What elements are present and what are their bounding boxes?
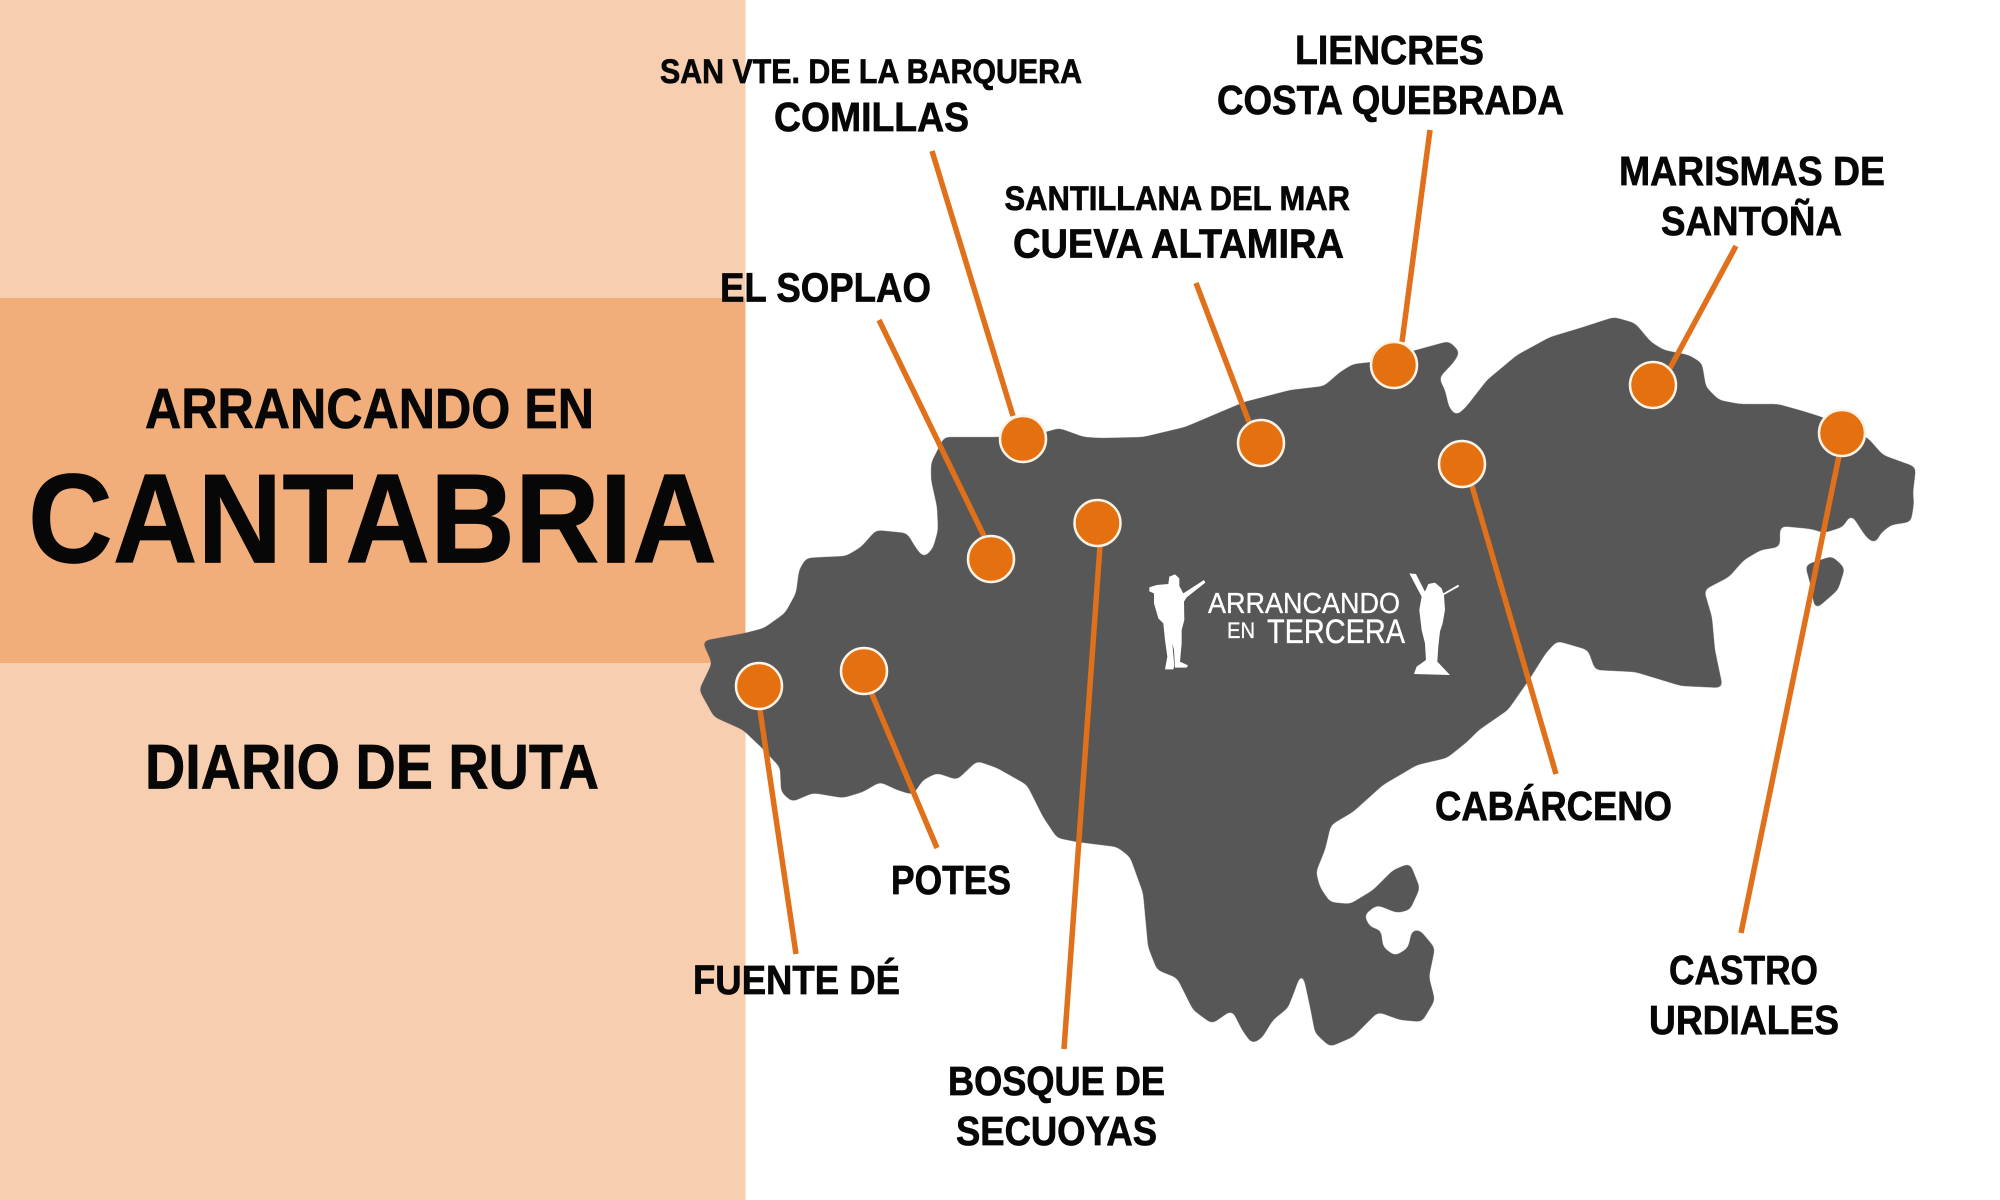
location: El Soplao <box>720 264 1014 582</box>
logo text: TERCERA: TERCERA <box>1267 613 1405 651</box>
location: Fuente Dé <box>693 663 900 1003</box>
location: Bosque de Secuoyas <box>948 500 1165 1154</box>
icon: hiker on summit <box>1409 573 1459 675</box>
location: Fuente Dé: FUENTE DÉ <box>693 957 900 1003</box>
logo text: EN: EN <box>1227 618 1255 643</box>
panel: left background <box>0 0 746 1200</box>
heading: ARRANCANDO EN: ARRANCANDO EN <box>145 377 594 441</box>
location: Cabárceno: CABÁRCENO <box>1435 783 1672 829</box>
location: San Vte. de la Barquera / Comillas: COMILLAS <box>774 94 969 140</box>
location: Santillana del Mar / Cueva Altamira: SANTILLANA DEL MAR <box>1004 180 1350 218</box>
map: Cantabria silhouette <box>699 317 1916 1047</box>
location: Marismas de Santoña: MARISMAS DE <box>1619 148 1885 194</box>
location: Cabárceno <box>1435 441 1672 829</box>
location: Potes <box>841 648 1011 903</box>
location: Liencres / Costa Quebrada: COSTA QUEBRADA <box>1217 77 1564 123</box>
location: San Vte. de la Barquera / Comillas: SAN VTE. DE LA BARQUERA <box>660 53 1082 91</box>
location: Santillana del Mar / Cueva Altamira <box>1004 180 1350 466</box>
icon: hiker pointing <box>1149 574 1205 669</box>
heading: DIARIO DE RUTA: DIARIO DE RUTA <box>145 732 599 802</box>
location: Bosque de Secuoyas: SECUOYAS <box>956 1108 1157 1154</box>
location: Bosque de Secuoyas: BOSQUE DE <box>948 1058 1165 1104</box>
location: Marismas de Santoña <box>1619 148 1885 408</box>
location: Marismas de Santoña: SANTOÑA <box>1661 198 1842 244</box>
heading: CANTABRIA: CANTABRIA <box>28 448 717 590</box>
location: Santillana del Mar / Cueva Altamira: CUEVA ALTAMIRA <box>1013 220 1344 266</box>
logo: Arrancando en Tercera <box>1149 573 1459 675</box>
location: Liencres / Costa Quebrada: LIENCRES <box>1295 27 1484 73</box>
location: Castro Urdiales <box>1649 410 1865 1043</box>
logo text: ARRANCANDO: ARRANCANDO <box>1208 588 1400 620</box>
location: Castro Urdiales: URDIALES <box>1649 997 1839 1043</box>
location: Liencres / Costa Quebrada <box>1217 27 1564 388</box>
panel: title band <box>0 298 746 663</box>
location: Castro Urdiales: CASTRO <box>1669 947 1818 993</box>
location: Potes: POTES <box>891 857 1011 903</box>
location: El Soplao: EL SOPLAO <box>720 264 931 310</box>
location: San Vte. de la Barquera / Comillas <box>660 53 1082 462</box>
